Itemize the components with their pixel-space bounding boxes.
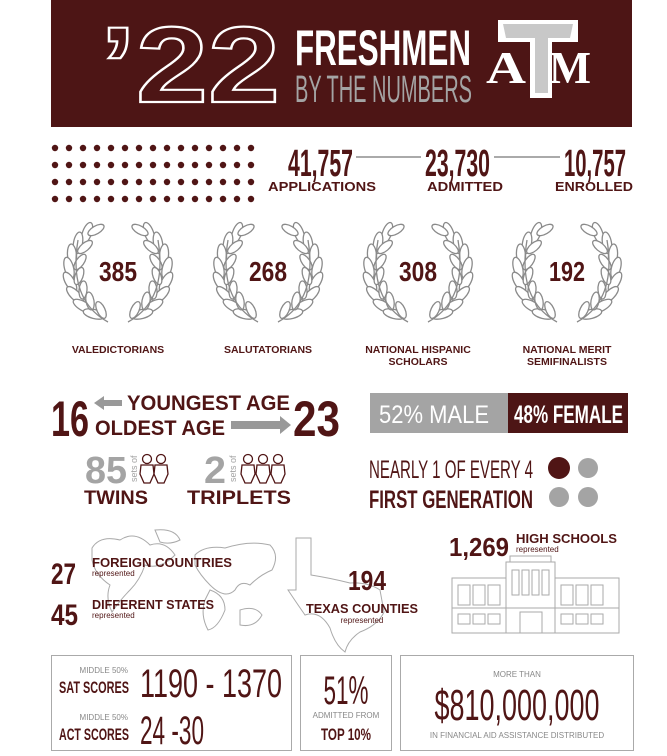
laurel: hispanic scholars: SCHOLARS: [389, 356, 447, 368]
stat: foreign countries: represented: [92, 569, 135, 578]
laurel: valedictorians: VALEDICTORIANS: [72, 344, 164, 356]
triplets: sets of: [228, 455, 238, 482]
panel: test scores: ACT SCORES: [59, 725, 129, 744]
stat: foreign countries: 27: [51, 558, 76, 591]
panel: top 10%: 51%: [324, 669, 368, 713]
panel: top 10%: [300, 656, 392, 750]
triplets: [187, 450, 291, 509]
high schools: HIGH SCHOOLS: [516, 531, 617, 546]
logo: ATM: A: [486, 42, 526, 93]
panel: test scores: [52, 656, 292, 753]
ages: [51, 391, 340, 447]
first generation: NEARLY 1 OF EVERY 4: [369, 456, 533, 484]
laurel: valedictorians: [61, 221, 175, 356]
ages: YOUNGEST AGE: [127, 392, 290, 415]
icon: world map: [92, 530, 276, 630]
panel: top 10%: ADMITTED FROM: [313, 711, 380, 720]
high schools: represented: [516, 545, 559, 554]
laurel: hispanic scholars: [361, 221, 475, 368]
admissions funnel stats: [268, 143, 633, 194]
laurel: salutatorians: SALUTATORIANS: [224, 344, 312, 356]
stat: different states: [51, 597, 214, 632]
twins: 85: [85, 450, 127, 492]
twins: TWINS: [84, 488, 148, 509]
gender bar: [370, 393, 628, 433]
admissions funnel stats: ENROLLED: [555, 179, 633, 194]
first generation: FIRST GENERATION: [369, 486, 533, 514]
panel: financial aid: [400, 656, 634, 750]
panel: financial aid: MORE THAN: [493, 670, 541, 679]
laurel: merit semifinalists: SEMIFINALISTS: [527, 356, 607, 368]
panel: test scores: MIDDLE 50%: [80, 666, 128, 675]
stat: foreign countries: [51, 555, 232, 591]
admissions funnel stats: 41,757: [288, 143, 353, 185]
title: FRESHMEN: FRESHMEN: [295, 20, 471, 76]
panel: test scores: 24 -30: [140, 709, 204, 753]
dot grid decoration: [52, 145, 254, 202]
panel: financial aid: IN FINANCIAL AID ASSISTANCE DISTRIBUTED: [430, 731, 604, 740]
laurel: hispanic scholars: NATIONAL HISPANIC: [365, 344, 471, 356]
subtitle: BY THE NUMBERS: BY THE NUMBERS: [295, 69, 472, 111]
logo: ATM: M: [549, 42, 591, 93]
laurel: salutatorians: 268: [249, 256, 287, 287]
title: '22: ’22: [100, 4, 280, 125]
stat: different states: DIFFERENT STATES: [92, 597, 214, 612]
admissions funnel stats: 23,730: [425, 143, 490, 185]
triplets: TRIPLETS: [187, 488, 291, 509]
gender bar: 52% MALE: [379, 401, 489, 429]
triplets: 2: [204, 450, 226, 492]
icon: texas map with counties: represented: [341, 616, 383, 625]
stat: different states: represented: [92, 611, 135, 620]
admissions funnel stats: APPLICATIONS: [268, 179, 376, 194]
laurel: merit semifinalists: 192: [549, 256, 585, 287]
twins: sets of: [129, 455, 139, 482]
panel: test scores: 1190 - 1370: [140, 662, 282, 706]
laurel: valedictorians: 385: [99, 256, 137, 287]
stat: different states: 45: [51, 599, 78, 632]
twins: [84, 450, 168, 509]
icon: school building: [452, 556, 619, 633]
high schools: 1,269: [449, 532, 509, 562]
panel: test scores: SAT SCORES: [59, 678, 129, 697]
stat: foreign countries: FOREIGN COUNTRIES: [92, 555, 232, 570]
laurel: merit semifinalists: [510, 221, 624, 368]
icon: texas map with counties: [288, 538, 418, 652]
first generation: [369, 456, 598, 514]
high schools: [449, 531, 619, 633]
admissions funnel stats: ADMITTED: [427, 179, 503, 194]
laurel: merit semifinalists: NATIONAL MERIT: [523, 344, 612, 356]
panel: top 10%: TOP 10%: [321, 725, 371, 744]
laurel: salutatorians: [211, 221, 325, 356]
ages: 23: [293, 391, 340, 447]
header banner: [51, 0, 632, 127]
ages: 16: [51, 391, 89, 447]
ages: OLDEST AGE: [95, 417, 225, 440]
laurel: hispanic scholars: 308: [399, 256, 437, 287]
icon: texas map with counties: 194: [348, 565, 386, 596]
logo: ATM: [486, 20, 591, 98]
icon: texas map with counties: TEXAS COUNTIES: [306, 601, 418, 616]
panel: test scores: MIDDLE 50%: [80, 713, 128, 722]
